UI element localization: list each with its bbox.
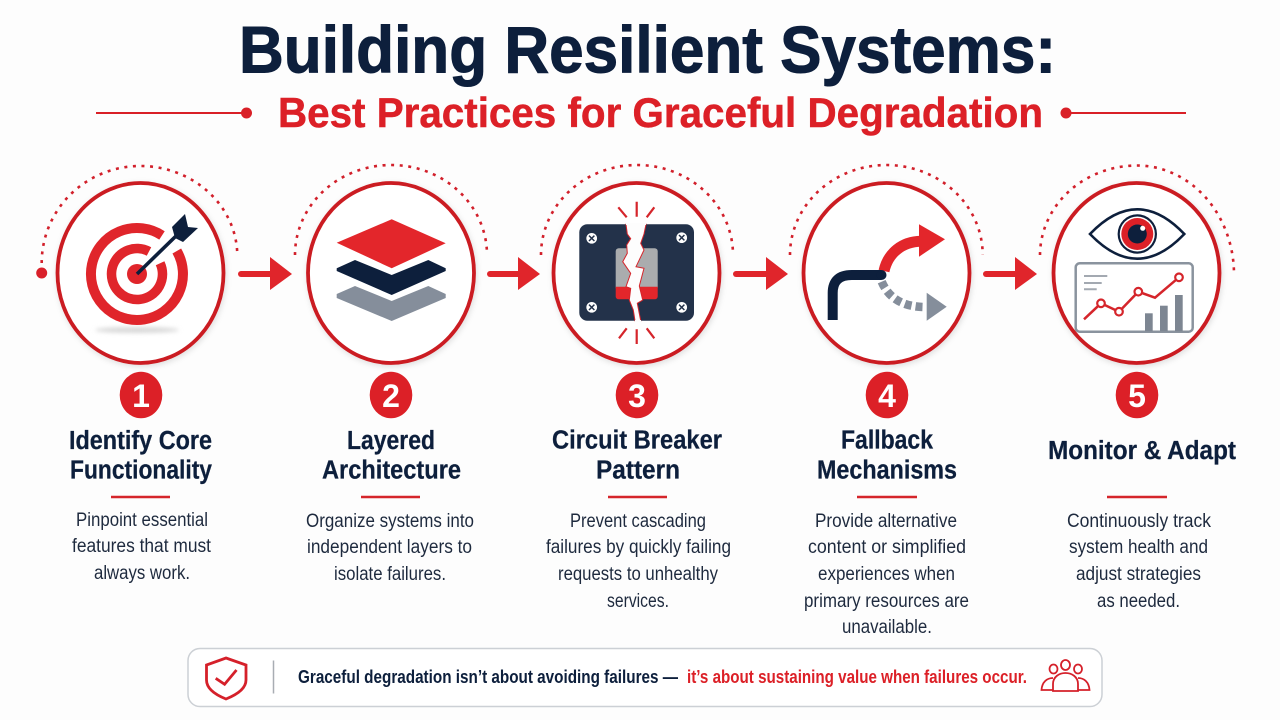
ring 2 — [308, 183, 474, 363]
callout text: it’s about sustaining value when failures occur. — [687, 667, 1027, 687]
description 4: Provide alternative — [815, 511, 957, 532]
description 4: content or simplified — [808, 537, 966, 558]
icon: fallback path arrows — [833, 224, 947, 321]
description 4: experiences when — [818, 564, 955, 585]
number badge 5: 5 — [1128, 378, 1146, 414]
dotted arc 4 — [790, 165, 983, 255]
number badge 4: 4 — [878, 378, 896, 414]
ring 5 — [1054, 183, 1220, 363]
description 3: services. — [607, 591, 669, 612]
description 1: Pinpoint essential — [76, 510, 208, 531]
ring 1 — [58, 183, 224, 363]
description 5: as needed. — [1097, 591, 1180, 612]
description 2: independent layers to — [307, 537, 472, 558]
heading 4: Mechanisms — [817, 456, 957, 484]
heading 4: Fallback — [841, 426, 934, 454]
heading 3: Circuit Breaker — [552, 426, 722, 454]
dotted arc 2 — [295, 165, 487, 255]
description 4: unavailable. — [842, 617, 932, 638]
arrow 4 to 5 — [986, 257, 1037, 290]
icon: broken circuit breaker — [579, 202, 694, 344]
description 5: system health and — [1069, 537, 1208, 558]
step 4: fallback mechanisms — [790, 165, 983, 638]
description 3: Prevent cascading — [570, 511, 706, 532]
arrow 2 to 3 — [490, 257, 540, 290]
description 5 — [1067, 511, 1211, 612]
ring 3 — [554, 183, 720, 363]
step 3: circuit breaker pattern — [541, 165, 733, 612]
number badge 1: 1 — [132, 378, 150, 414]
description 1: always work. — [94, 563, 190, 584]
description 1 — [72, 510, 212, 584]
callout bar — [188, 648, 1102, 706]
heading 3: Pattern — [596, 456, 680, 484]
number badge 3: 3 — [628, 378, 646, 414]
description 2 — [306, 511, 474, 585]
number badge 5 — [1116, 372, 1158, 418]
description 5: adjust strategies — [1076, 564, 1201, 585]
callout text — [298, 667, 1027, 687]
description 3: requests to unhealthy — [558, 564, 718, 585]
number badge 2: 2 — [382, 378, 400, 414]
step 2: layered architecture — [295, 165, 487, 585]
heading 1: Functionality — [70, 456, 213, 484]
heading 2: Layered — [347, 427, 435, 455]
dotted arc 5 — [1040, 166, 1234, 275]
icon: shield check — [206, 658, 246, 699]
description 5: Continuously track — [1067, 511, 1211, 532]
ring 4 — [804, 183, 970, 363]
heading 3 — [552, 426, 722, 484]
callout text: Graceful degradation isn’t about avoiding failures — — [298, 667, 678, 687]
number badge 1 — [120, 372, 162, 418]
icon: target with dart — [91, 214, 198, 333]
heading 1: Identify Core — [69, 427, 212, 455]
icon: dashboard chart — [1076, 263, 1193, 332]
heading 5: Monitor & Adapt — [1048, 437, 1236, 465]
icon: people — [1042, 660, 1090, 691]
subtitle with side rules: Best Practices for Graceful Degradation — [278, 89, 1043, 136]
arrow 1 to 2 — [241, 257, 292, 290]
number badge 2 — [370, 372, 412, 418]
dotted arc 1 — [42, 166, 237, 263]
description 2: Organize systems into — [306, 511, 474, 532]
step 1: identify core functionality — [36, 166, 237, 584]
icon: eye — [1090, 209, 1184, 259]
title: Building Resilient Systems: — [239, 12, 1056, 86]
heading 2: Architecture — [322, 456, 461, 484]
description 3 — [546, 511, 731, 612]
heading 1 — [69, 427, 213, 484]
description 2: isolate failures. — [334, 564, 446, 585]
icon: stacked layers — [337, 219, 446, 321]
description 1: features that must — [72, 536, 212, 557]
number badge 3 — [616, 372, 658, 418]
dotted arc 3 — [541, 165, 733, 255]
arrow 3 to 4 — [736, 257, 788, 290]
heading 2 — [322, 427, 461, 484]
number badge 4 — [866, 372, 908, 418]
description 3: failures by quickly failing — [546, 537, 731, 558]
description 4 — [804, 511, 969, 638]
step 5: monitor and adapt — [1040, 166, 1236, 612]
start dot — [36, 268, 47, 278]
description 4: primary resources are — [804, 591, 969, 612]
heading 4 — [817, 426, 957, 484]
